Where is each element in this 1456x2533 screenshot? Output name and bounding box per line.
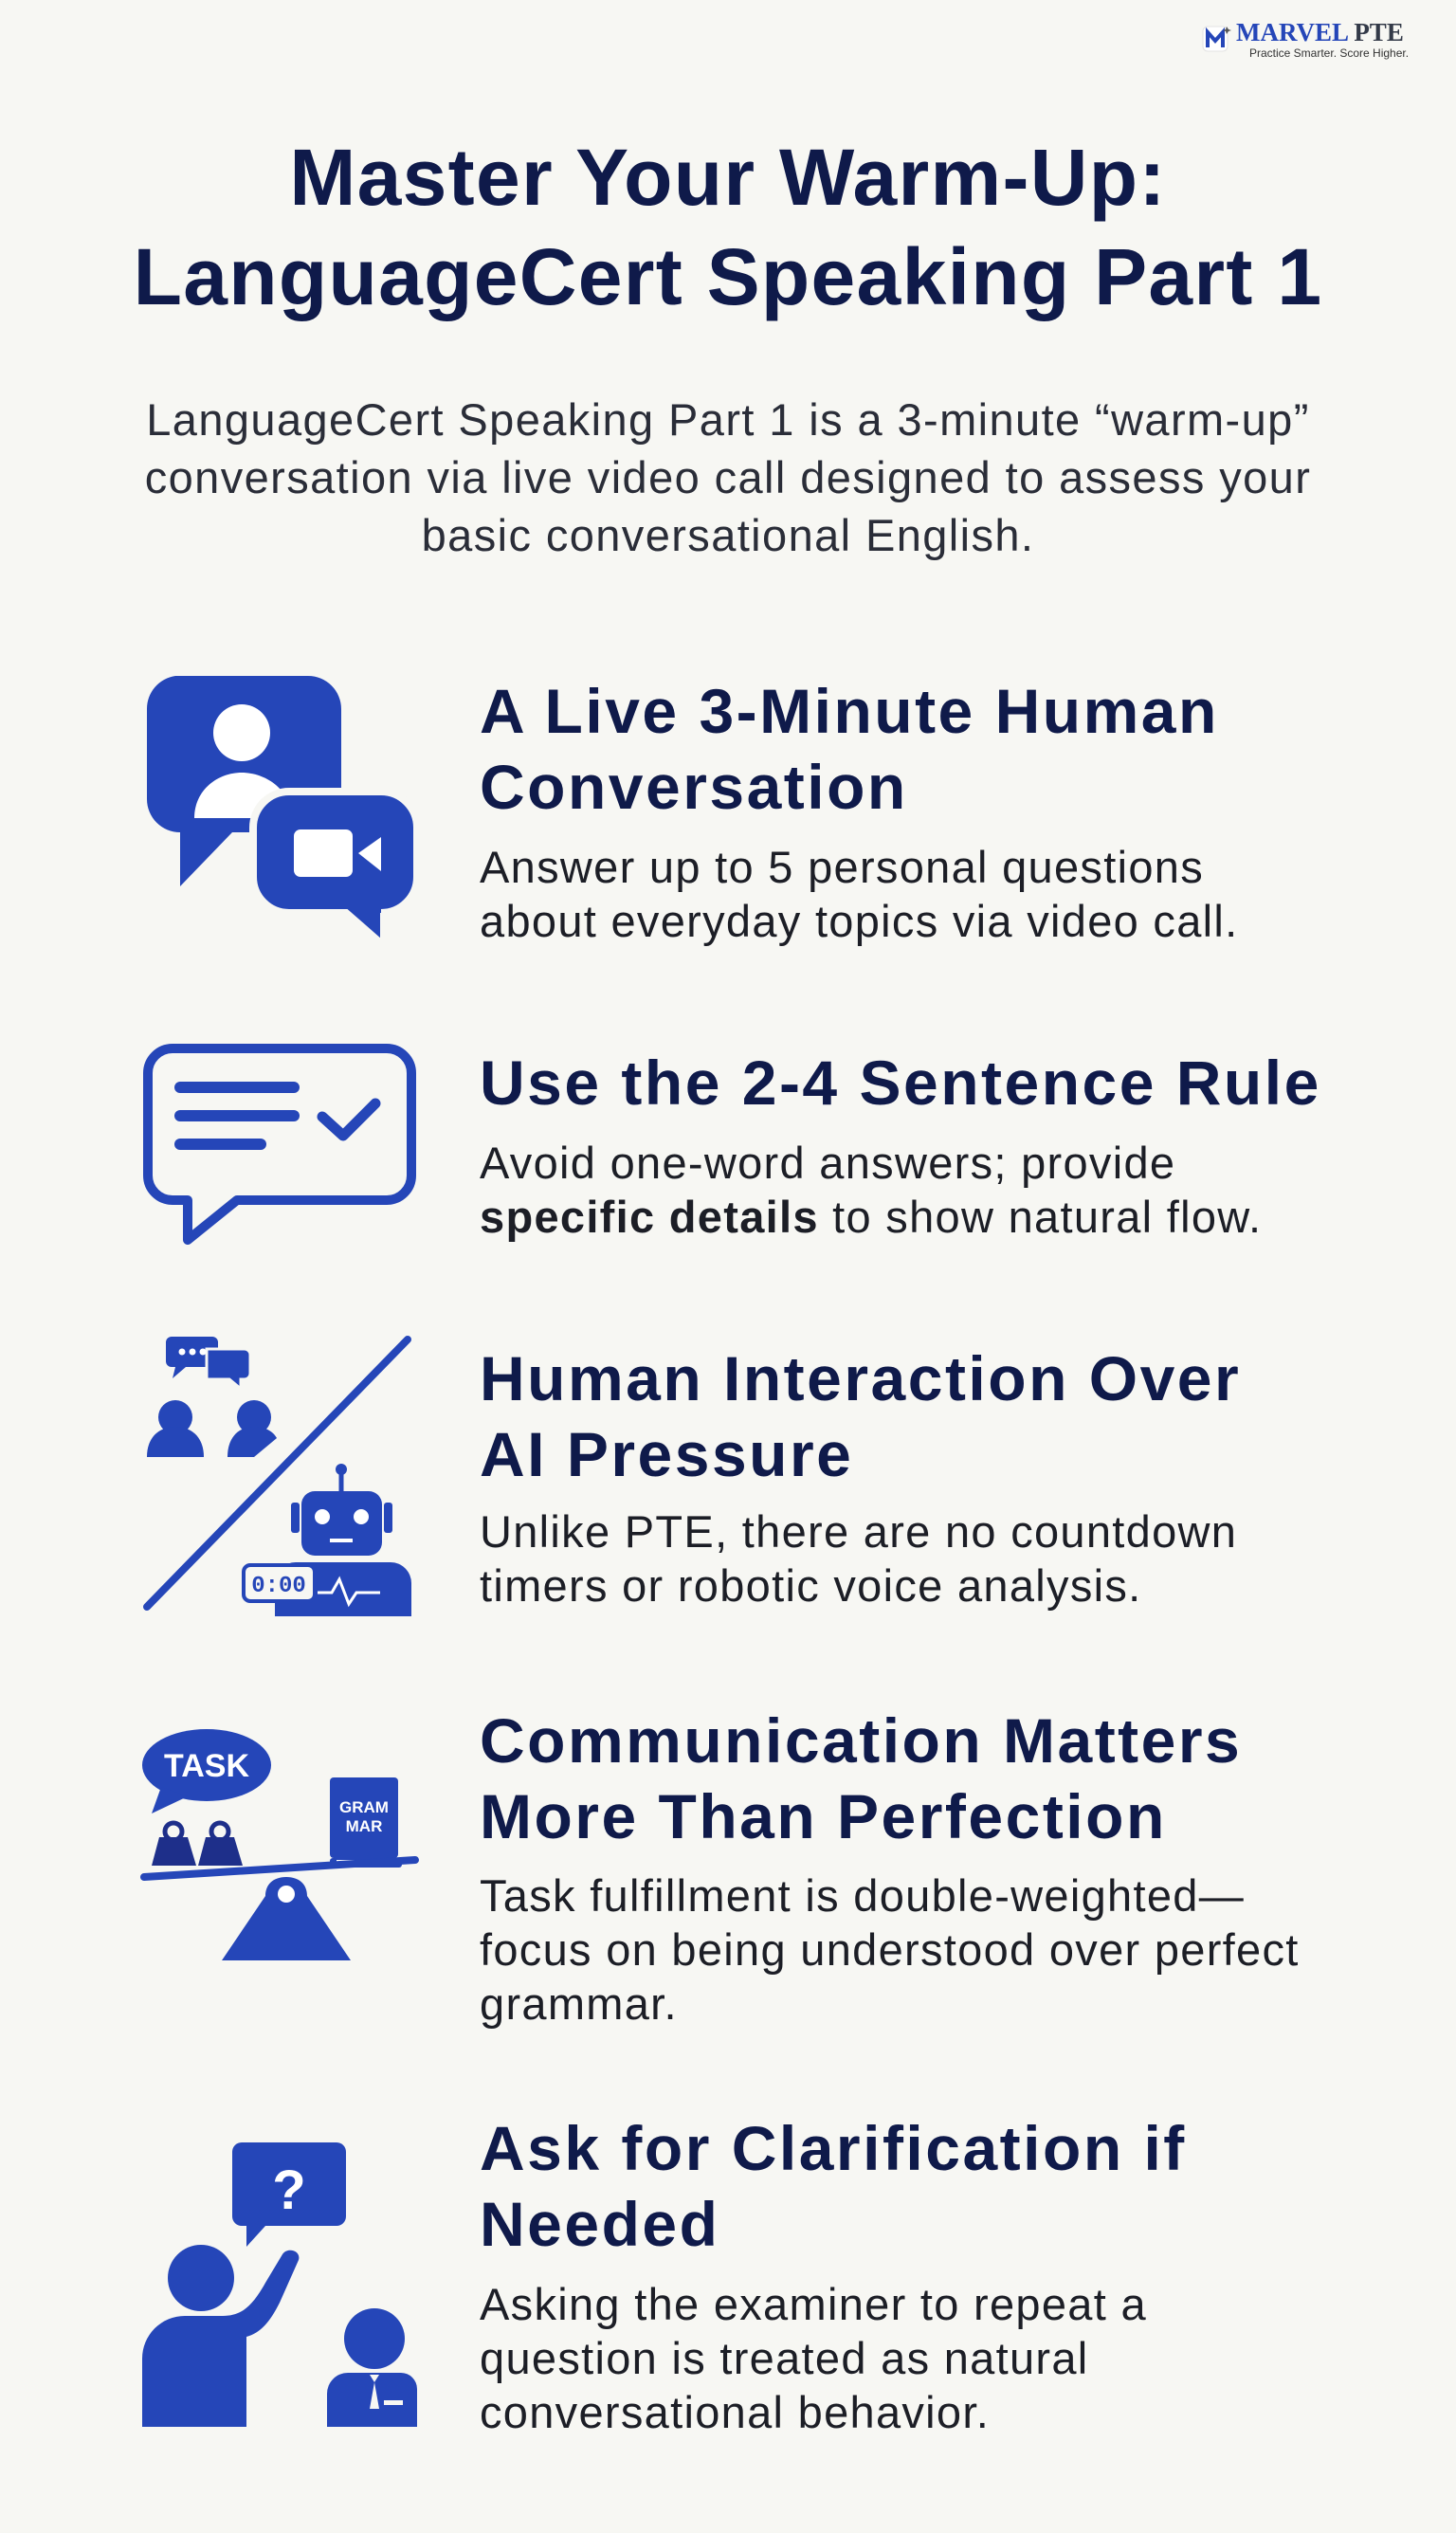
heading 1: A Live 3-Minute Human	[480, 676, 1219, 746]
icon: logo M	[1202, 27, 1231, 51]
title: Master Your Warm-Up:	[289, 133, 1167, 222]
icon: asking for clarification	[142, 2142, 417, 2427]
icon: task vs grammar scale: MAR	[346, 1817, 382, 1835]
heading 1: Conversation	[480, 752, 908, 822]
heading 3	[480, 1343, 1241, 1489]
body 4: Task fulfillment is double-weighted—	[480, 1870, 1245, 1921]
subtitle: LanguageCert Speaking Part 1 is a 3-minute “warm-up”	[146, 394, 1310, 445]
logo	[1202, 18, 1409, 60]
logo: Practice Smarter. Score Higher.	[1249, 46, 1409, 60]
body 1	[480, 842, 1239, 946]
heading 3: AI Pressure	[480, 1419, 853, 1489]
heading 4: More Than Perfection	[480, 1781, 1167, 1851]
subtitle: basic conversational English.	[422, 510, 1034, 560]
body 5	[480, 2279, 1147, 2437]
title: LanguageCert Speaking Part 1	[134, 232, 1322, 321]
body 3	[480, 1506, 1237, 1611]
body 2: Avoid one-word answers; provide	[480, 1138, 1175, 1188]
body 5: conversational behavior.	[480, 2387, 990, 2437]
heading 4	[480, 1705, 1242, 1851]
icon: sentence bubble with check	[143, 1044, 416, 1245]
heading 5: Needed	[480, 2189, 719, 2259]
icon: humans vs robot: 0:00	[251, 1574, 306, 1599]
heading 4: Communication Matters	[480, 1705, 1242, 1776]
icon: humans vs robot	[143, 1336, 411, 1616]
heading 1	[480, 676, 1219, 822]
heading 5: Ask for Clarification if	[480, 2113, 1187, 2183]
body 3: Unlike PTE, there are no countdown	[480, 1506, 1237, 1557]
body 3: timers or robotic voice analysis.	[480, 1560, 1142, 1611]
body 5: Asking the examiner to repeat a	[480, 2279, 1147, 2329]
body 2	[480, 1138, 1262, 1242]
title	[134, 133, 1322, 321]
body 5: question is treated as natural	[480, 2333, 1089, 2383]
icon: asking for clarification: ?	[272, 2159, 306, 2221]
logo: MARVEL PTE	[1236, 18, 1404, 46]
icon: task vs grammar scale: TASK	[164, 1748, 249, 1784]
body 2: specific details to show natural flow.	[480, 1192, 1262, 1242]
heading 3: Human Interaction Over	[480, 1343, 1241, 1413]
heading 5	[480, 2113, 1187, 2259]
icon: task vs grammar scale	[140, 1729, 419, 1960]
icon: video call bubbles	[147, 676, 413, 938]
subtitle: conversation via live video call designed to assess your	[145, 452, 1311, 502]
subtitle	[145, 394, 1311, 560]
icon: task vs grammar scale: GRAM	[339, 1798, 389, 1816]
body 4	[480, 1870, 1300, 2029]
body 1: about everyday topics via video call.	[480, 896, 1239, 946]
body 4: focus on being understood over perfect	[480, 1924, 1300, 1975]
body 4: grammar.	[480, 1978, 678, 2029]
heading 2: Use the 2-4 Sentence Rule	[480, 1048, 1321, 1118]
body 1: Answer up to 5 personal questions	[480, 842, 1204, 892]
